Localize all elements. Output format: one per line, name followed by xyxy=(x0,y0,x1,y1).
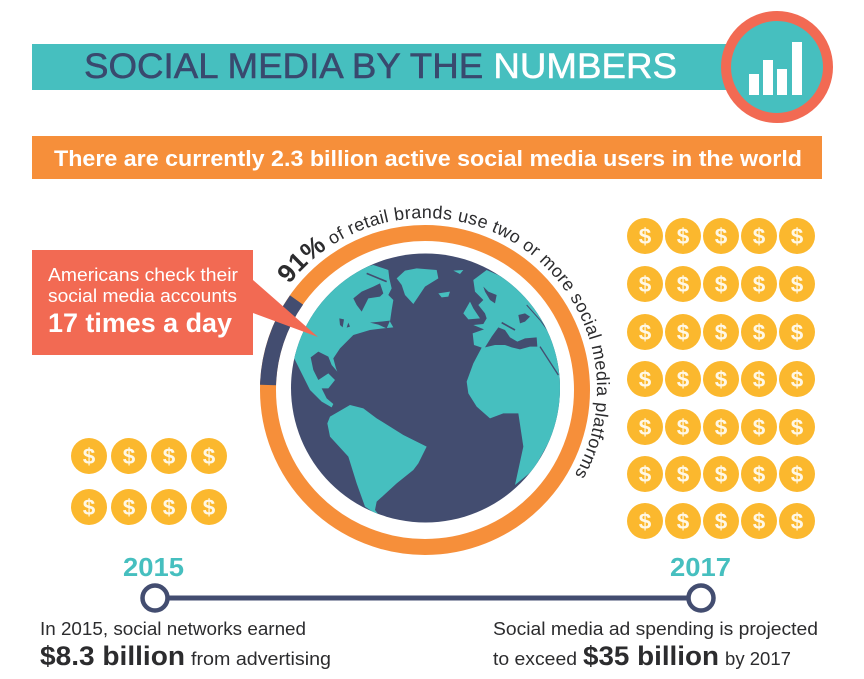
callout: Americans check xyxy=(32,250,318,355)
globe with percentage ring xyxy=(260,206,610,555)
header banner xyxy=(32,16,828,118)
text: 2017 projection xyxy=(493,619,818,671)
Britain xyxy=(463,302,480,319)
text: 2015 earnings: In 2015, social networks earned xyxy=(40,619,306,639)
ring: 91 percent orange xyxy=(268,233,582,547)
straits and narrow seas xyxy=(367,273,558,375)
subtitle banner xyxy=(32,136,822,179)
text: 2015 earnings: $8.3 billion xyxy=(40,641,185,671)
text: 2015 earnings: from advertising xyxy=(191,649,331,669)
Eurasia and Africa xyxy=(467,270,570,485)
Iceland and Svalbard xyxy=(438,270,463,297)
Greenland xyxy=(397,268,438,304)
Great Lakes and St Lawrence xyxy=(339,318,390,328)
callout: Americans check: social media accounts xyxy=(48,286,237,306)
Mediterranean xyxy=(485,327,537,349)
text: 2015 earnings xyxy=(40,619,331,671)
North America xyxy=(283,265,393,407)
Black Sea xyxy=(518,313,530,323)
ring: remaining navy segment xyxy=(268,300,296,385)
timeline xyxy=(123,552,731,610)
subtitle banner: There are currently 2.3 billion active social media users in the world xyxy=(54,146,802,171)
text: 2017 projection: Social media ad spending is projected xyxy=(493,619,818,639)
Antarctic speck xyxy=(393,523,402,525)
callout: Americans check: Americans check their xyxy=(48,265,238,285)
ring text: 91% of retail brands use two or more social media platforms xyxy=(278,206,610,478)
globe xyxy=(283,254,570,525)
text: 2017 projection: $35 billion xyxy=(583,641,719,671)
Hudson Bay xyxy=(353,283,383,312)
coins: 2017 xyxy=(627,218,815,539)
text: 2017 projection: by 2017 xyxy=(725,649,791,669)
year 2017: 2017 xyxy=(670,552,731,582)
South America xyxy=(327,405,427,517)
Baltic xyxy=(483,287,497,303)
year 2015: 2015 xyxy=(123,552,184,582)
coins: 2015 xyxy=(71,438,227,525)
text: 2017 projection: to exceed xyxy=(493,649,577,669)
icon: bar chart badge xyxy=(726,16,828,118)
title: SOCIAL MEDIA BY THE NUMBERS xyxy=(84,47,677,86)
callout: Americans check: 17 times a day xyxy=(48,308,232,338)
